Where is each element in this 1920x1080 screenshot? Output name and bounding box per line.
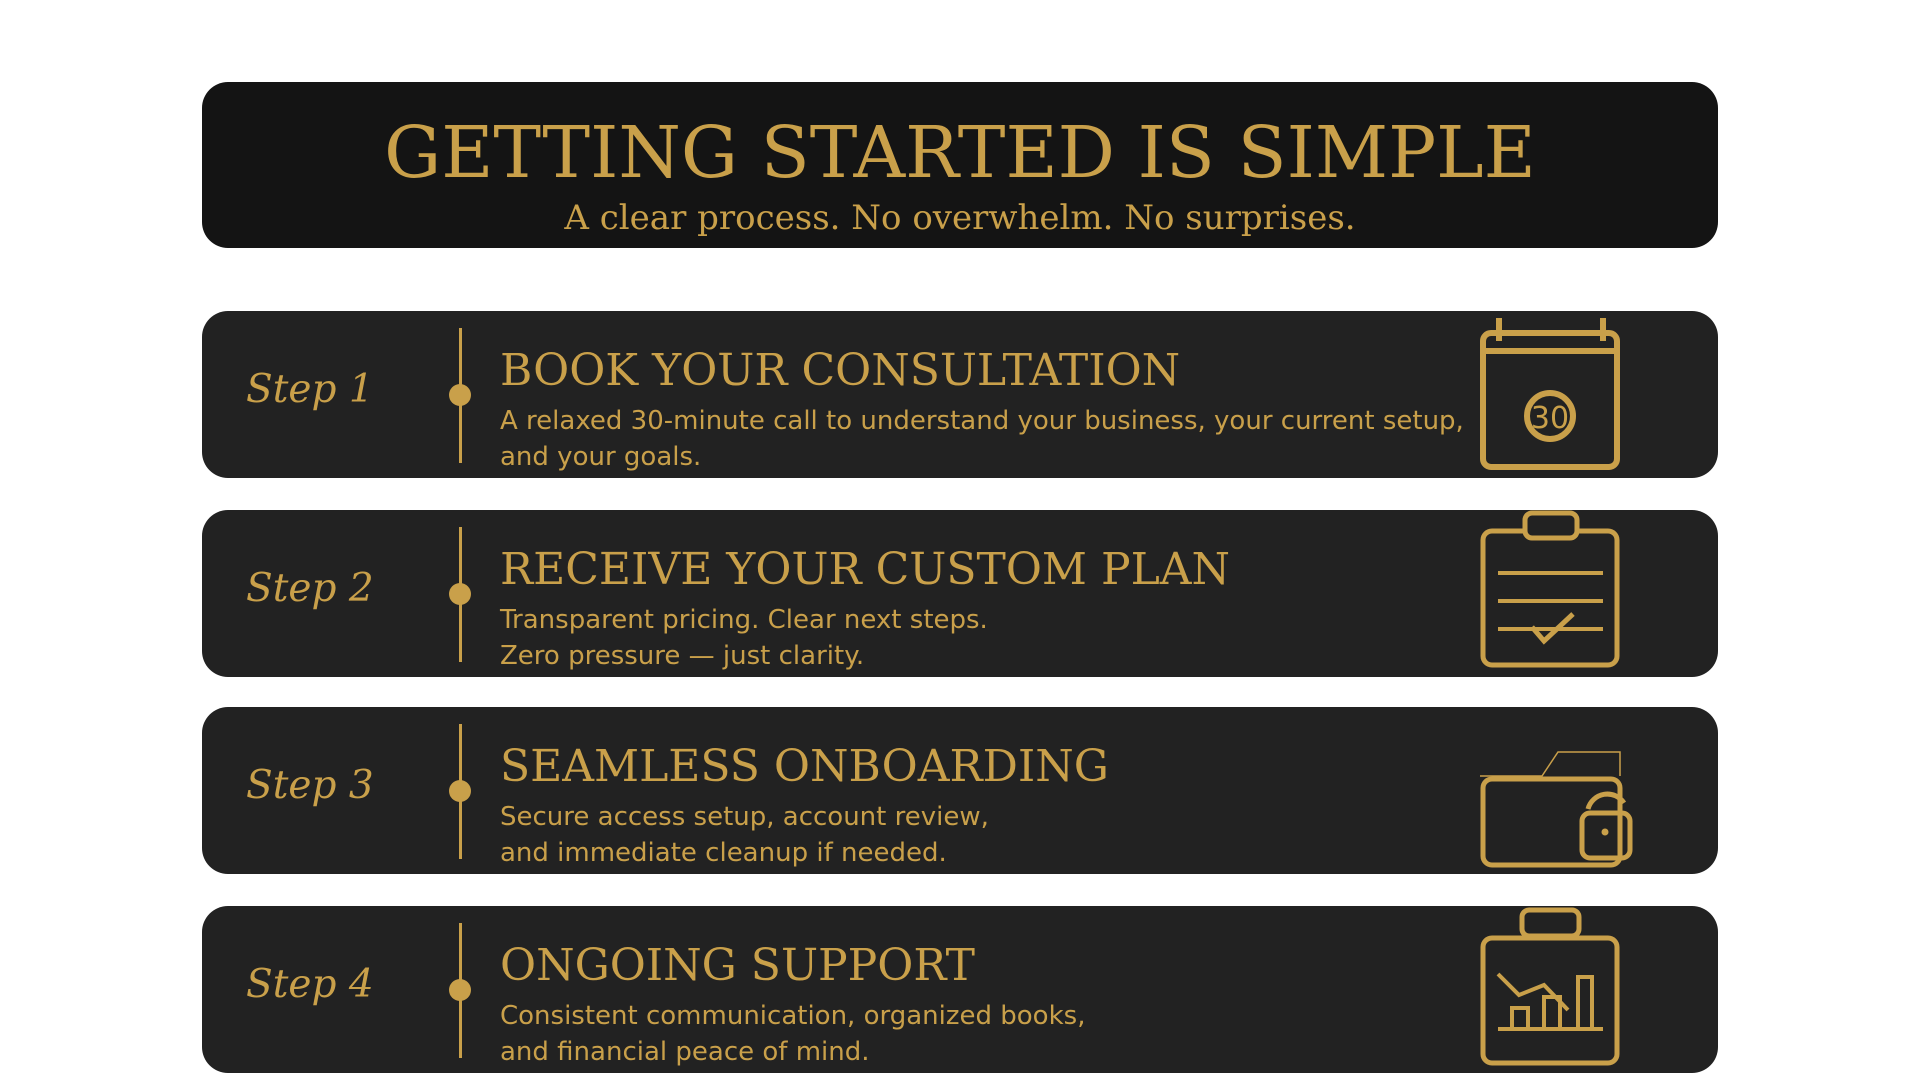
subtitle: A clear process. No overwhelm. No surprises. xyxy=(564,198,1356,238)
body text xyxy=(500,406,1464,472)
heading: ONGOING SUPPORT xyxy=(500,940,975,991)
step label: Step 3 xyxy=(246,763,374,808)
step label: Step 1 xyxy=(246,367,374,412)
heading: RECEIVE YOUR CUSTOM PLAN xyxy=(500,544,1230,595)
heading: SEAMLESS ONBOARDING xyxy=(500,741,1109,792)
icon: briefcase chart xyxy=(1480,908,1620,1066)
timeline marker xyxy=(459,923,462,1058)
step label: Step 4 xyxy=(246,962,374,1007)
body text: and your goals. xyxy=(500,442,701,472)
body text: Transparent pricing. Clear next steps. xyxy=(500,605,988,635)
body text: and immediate cleanup if needed. xyxy=(500,838,947,868)
timeline marker xyxy=(459,527,462,662)
icon: calendar: 30 xyxy=(1531,401,1569,436)
body text xyxy=(500,1001,1085,1066)
title: GETTING STARTED IS SIMPLE xyxy=(384,111,1536,194)
body text xyxy=(500,802,989,868)
header panel xyxy=(202,82,1718,248)
panel: step 3 xyxy=(202,707,1718,874)
timeline marker xyxy=(459,724,462,859)
panel: step 1 xyxy=(202,311,1718,478)
body text: Zero pressure — just clarity. xyxy=(500,640,864,670)
icon: folder with lock xyxy=(1480,751,1632,868)
panel: step 2 xyxy=(202,510,1718,677)
body text: A relaxed 30-minute call to understand your business, your current setup, xyxy=(500,406,1464,436)
body text: Secure access setup, account review, xyxy=(500,802,989,832)
body text: and financial peace of mind. xyxy=(500,1036,870,1066)
heading: BOOK YOUR CONSULTATION xyxy=(500,345,1180,396)
panel: step 4 xyxy=(202,906,1718,1073)
step label: Step 2 xyxy=(246,566,374,611)
body text: Consistent communication, organized books, xyxy=(500,1001,1085,1031)
body text xyxy=(500,605,988,670)
timeline marker xyxy=(459,328,462,463)
icon: calendar xyxy=(1480,318,1620,470)
icon: clipboard xyxy=(1480,510,1620,668)
